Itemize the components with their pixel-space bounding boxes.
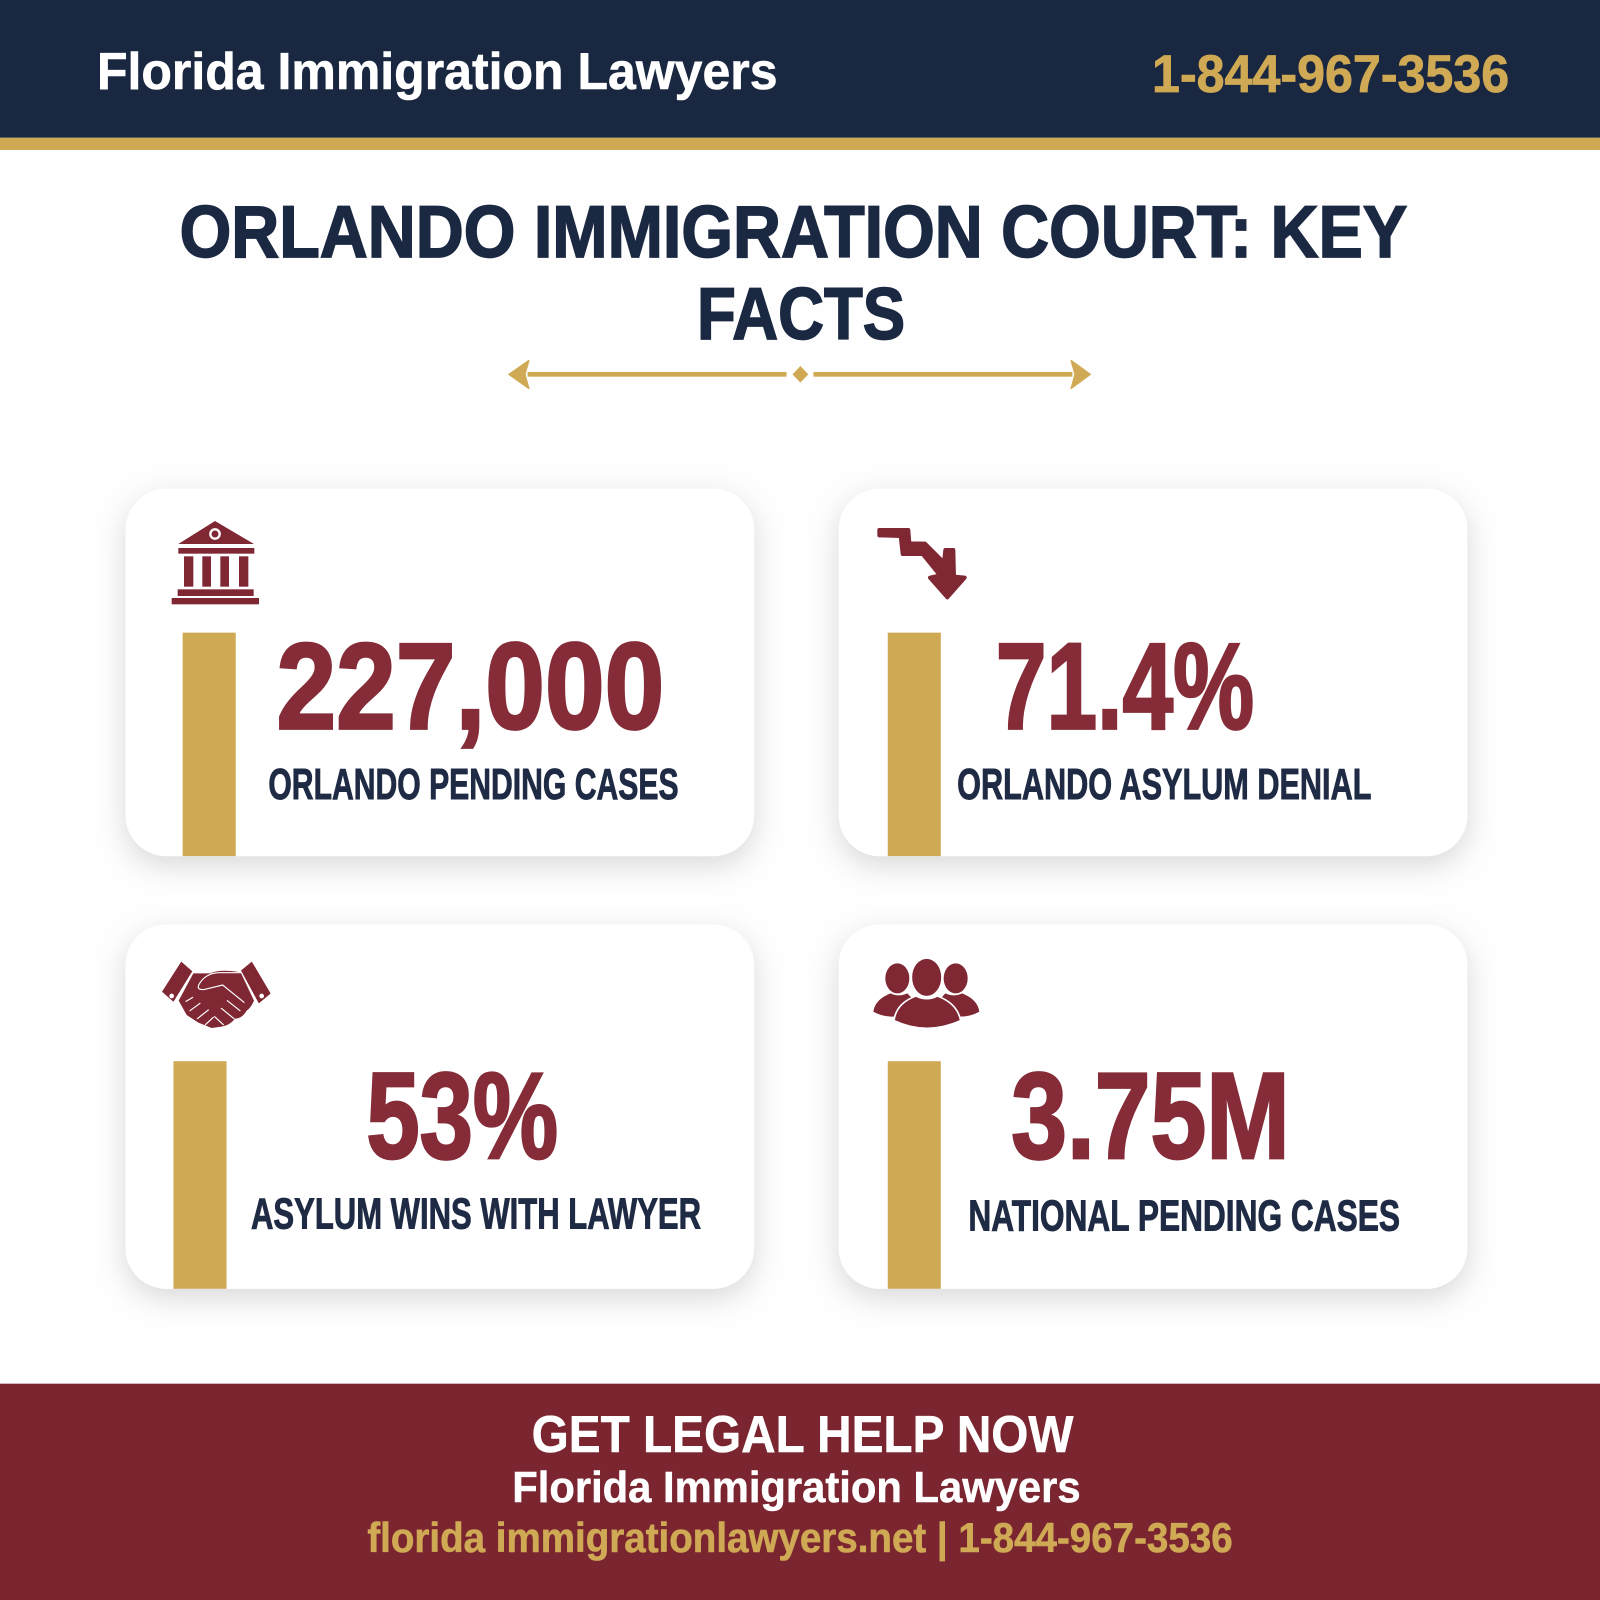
gold accent bar [888, 1061, 941, 1289]
statistic: 227,000 [277, 618, 664, 755]
gold accent bar [183, 633, 236, 856]
gold accent bar [888, 633, 941, 856]
panel: national pending cases [839, 924, 1467, 1289]
panel: Orlando pending cases [126, 489, 754, 856]
title: FACTS [697, 272, 905, 355]
statistic: 53% [366, 1047, 558, 1184]
icon: handshake [163, 962, 270, 1028]
title: ORLANDO IMMIGRATION COURT: KEY [180, 190, 1407, 273]
panel: Orlando asylum denial [839, 489, 1467, 856]
header band [0, 0, 1600, 150]
label: NATIONAL PENDING CASES [968, 1192, 1400, 1241]
footer website and phone: florida immigrationlawyers.net | 1-844-967-3536 [367, 1514, 1233, 1562]
panel: asylum wins with lawyer [126, 924, 754, 1289]
header phone number: 1-844-967-3536 [1152, 45, 1509, 104]
icon: courthouse [172, 521, 259, 604]
statistic: 3.75M [1011, 1047, 1290, 1184]
header firm name: Florida Immigration Lawyers [97, 43, 778, 101]
icon: group of people [873, 958, 979, 1028]
label: ORLANDO PENDING CASES [268, 760, 679, 809]
icon: falling arrow [879, 530, 965, 597]
label: ORLANDO ASYLUM DENIAL [957, 760, 1371, 809]
footer band [0, 1384, 1600, 1600]
title [180, 190, 1407, 355]
footer firm name: Florida Immigration Lawyers [512, 1463, 1081, 1512]
footer call to action: GET LEGAL HELP NOW [532, 1406, 1074, 1464]
statistic: 71.4% [996, 618, 1254, 755]
gold accent bar [173, 1061, 227, 1289]
title divider arrow [509, 361, 1090, 388]
label: ASYLUM WINS WITH LAWYER [251, 1190, 701, 1239]
